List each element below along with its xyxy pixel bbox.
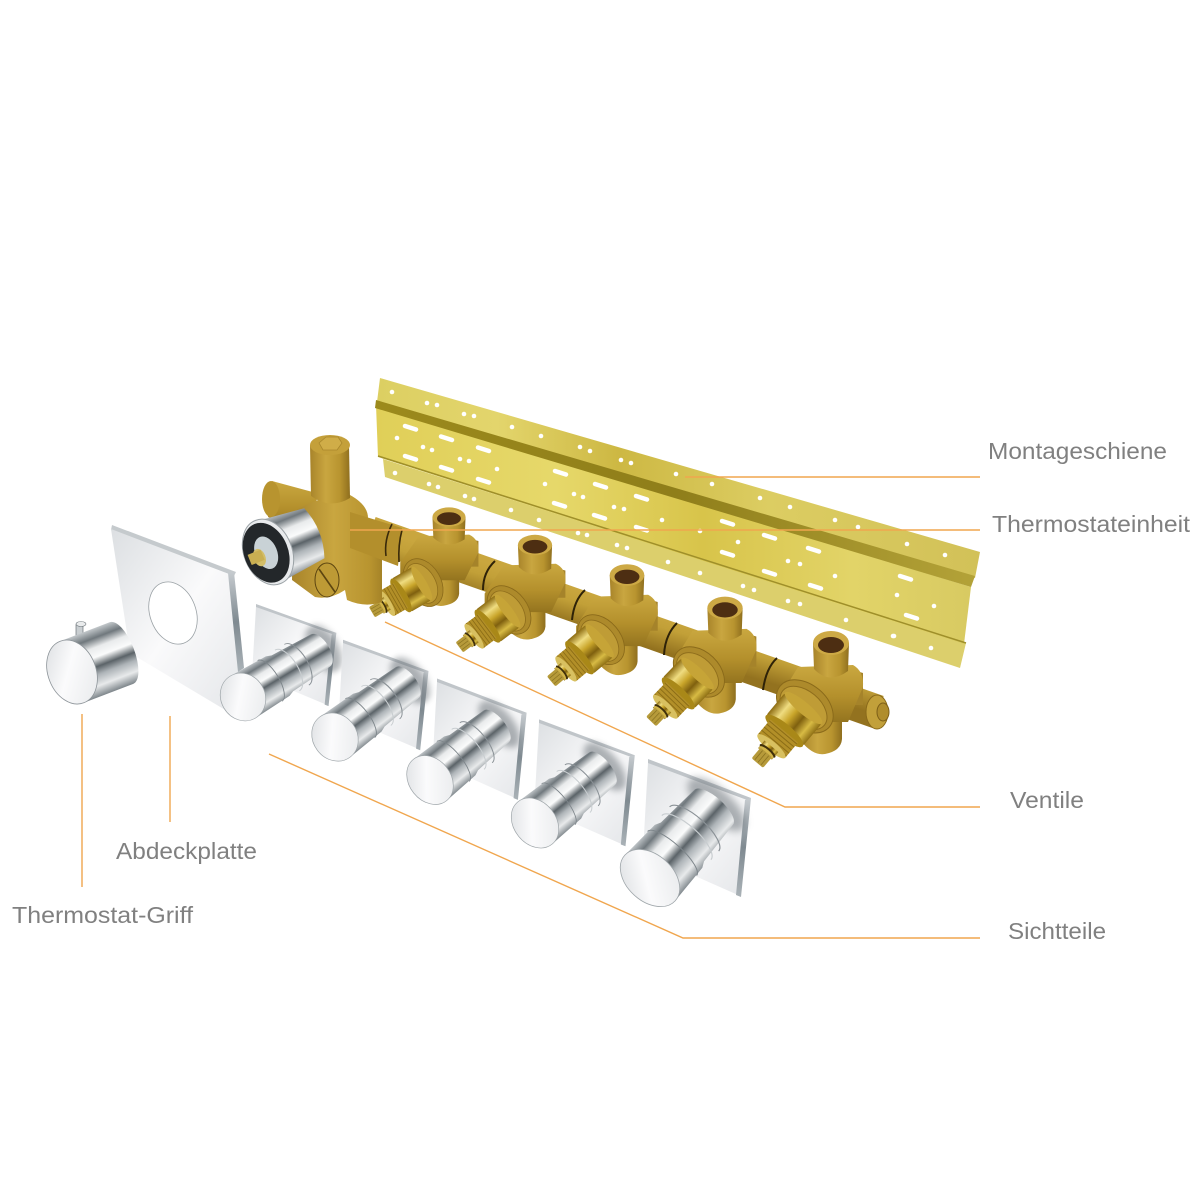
chrome cartridge [233,500,332,593]
panel: trim unit 5 [608,759,753,919]
connecting sleeve [350,512,402,566]
valve 4 [630,597,756,742]
valve 5 [733,631,863,784]
label: Abdeckplatte: Abdeckplatte [116,838,257,864]
valve 3 [533,564,658,703]
slotted screw [315,563,339,597]
knob 3 [396,694,527,815]
thermostat body [292,495,396,605]
valve 1 [359,507,479,634]
rail lower flange [383,459,966,668]
panel: trim unit 2 [301,640,438,772]
manifold pipe [370,533,878,712]
panel: trim unit 3 [396,678,527,815]
panel: thermostat handle [38,618,145,711]
stem 2 [443,577,540,669]
label: Thermostateinheit: Thermostateinheit [992,511,1191,537]
label: Sichtteile: Sichtteile [1008,918,1106,944]
label: Montageschiene: Montageschiene [988,438,1167,464]
rail slots [405,426,917,618]
knob 1 [211,619,349,731]
panel: valve manifold [359,507,889,784]
rail main face [376,405,971,644]
stem 4 [630,637,734,742]
valve 2 [443,535,565,669]
stem 5 [733,669,844,784]
stem 1 [359,552,451,634]
panel: thermostat unit [233,435,402,605]
panel: trim unit 4 [500,719,635,859]
rail holes [390,390,947,650]
label: Ventile: Ventile [1010,787,1084,813]
label: Thermostat-Griff: Thermostat-Griff [12,902,194,928]
stem 3 [533,606,634,703]
left pipe [262,481,320,530]
plate hole [140,575,206,651]
knob 5 [608,769,753,919]
rail upper flange [377,378,980,578]
knob 2 [301,650,438,772]
top cylinder [310,435,350,504]
panel: cover plate [111,525,244,717]
pipe end cap [866,695,889,729]
panel: mounting rail [375,378,980,668]
leader lines [82,477,980,938]
handle pin [76,622,86,637]
knob 4 [500,735,634,859]
panel: trim unit 1 [211,604,349,731]
rail channel [375,400,975,587]
pipe seam rings [483,561,777,690]
